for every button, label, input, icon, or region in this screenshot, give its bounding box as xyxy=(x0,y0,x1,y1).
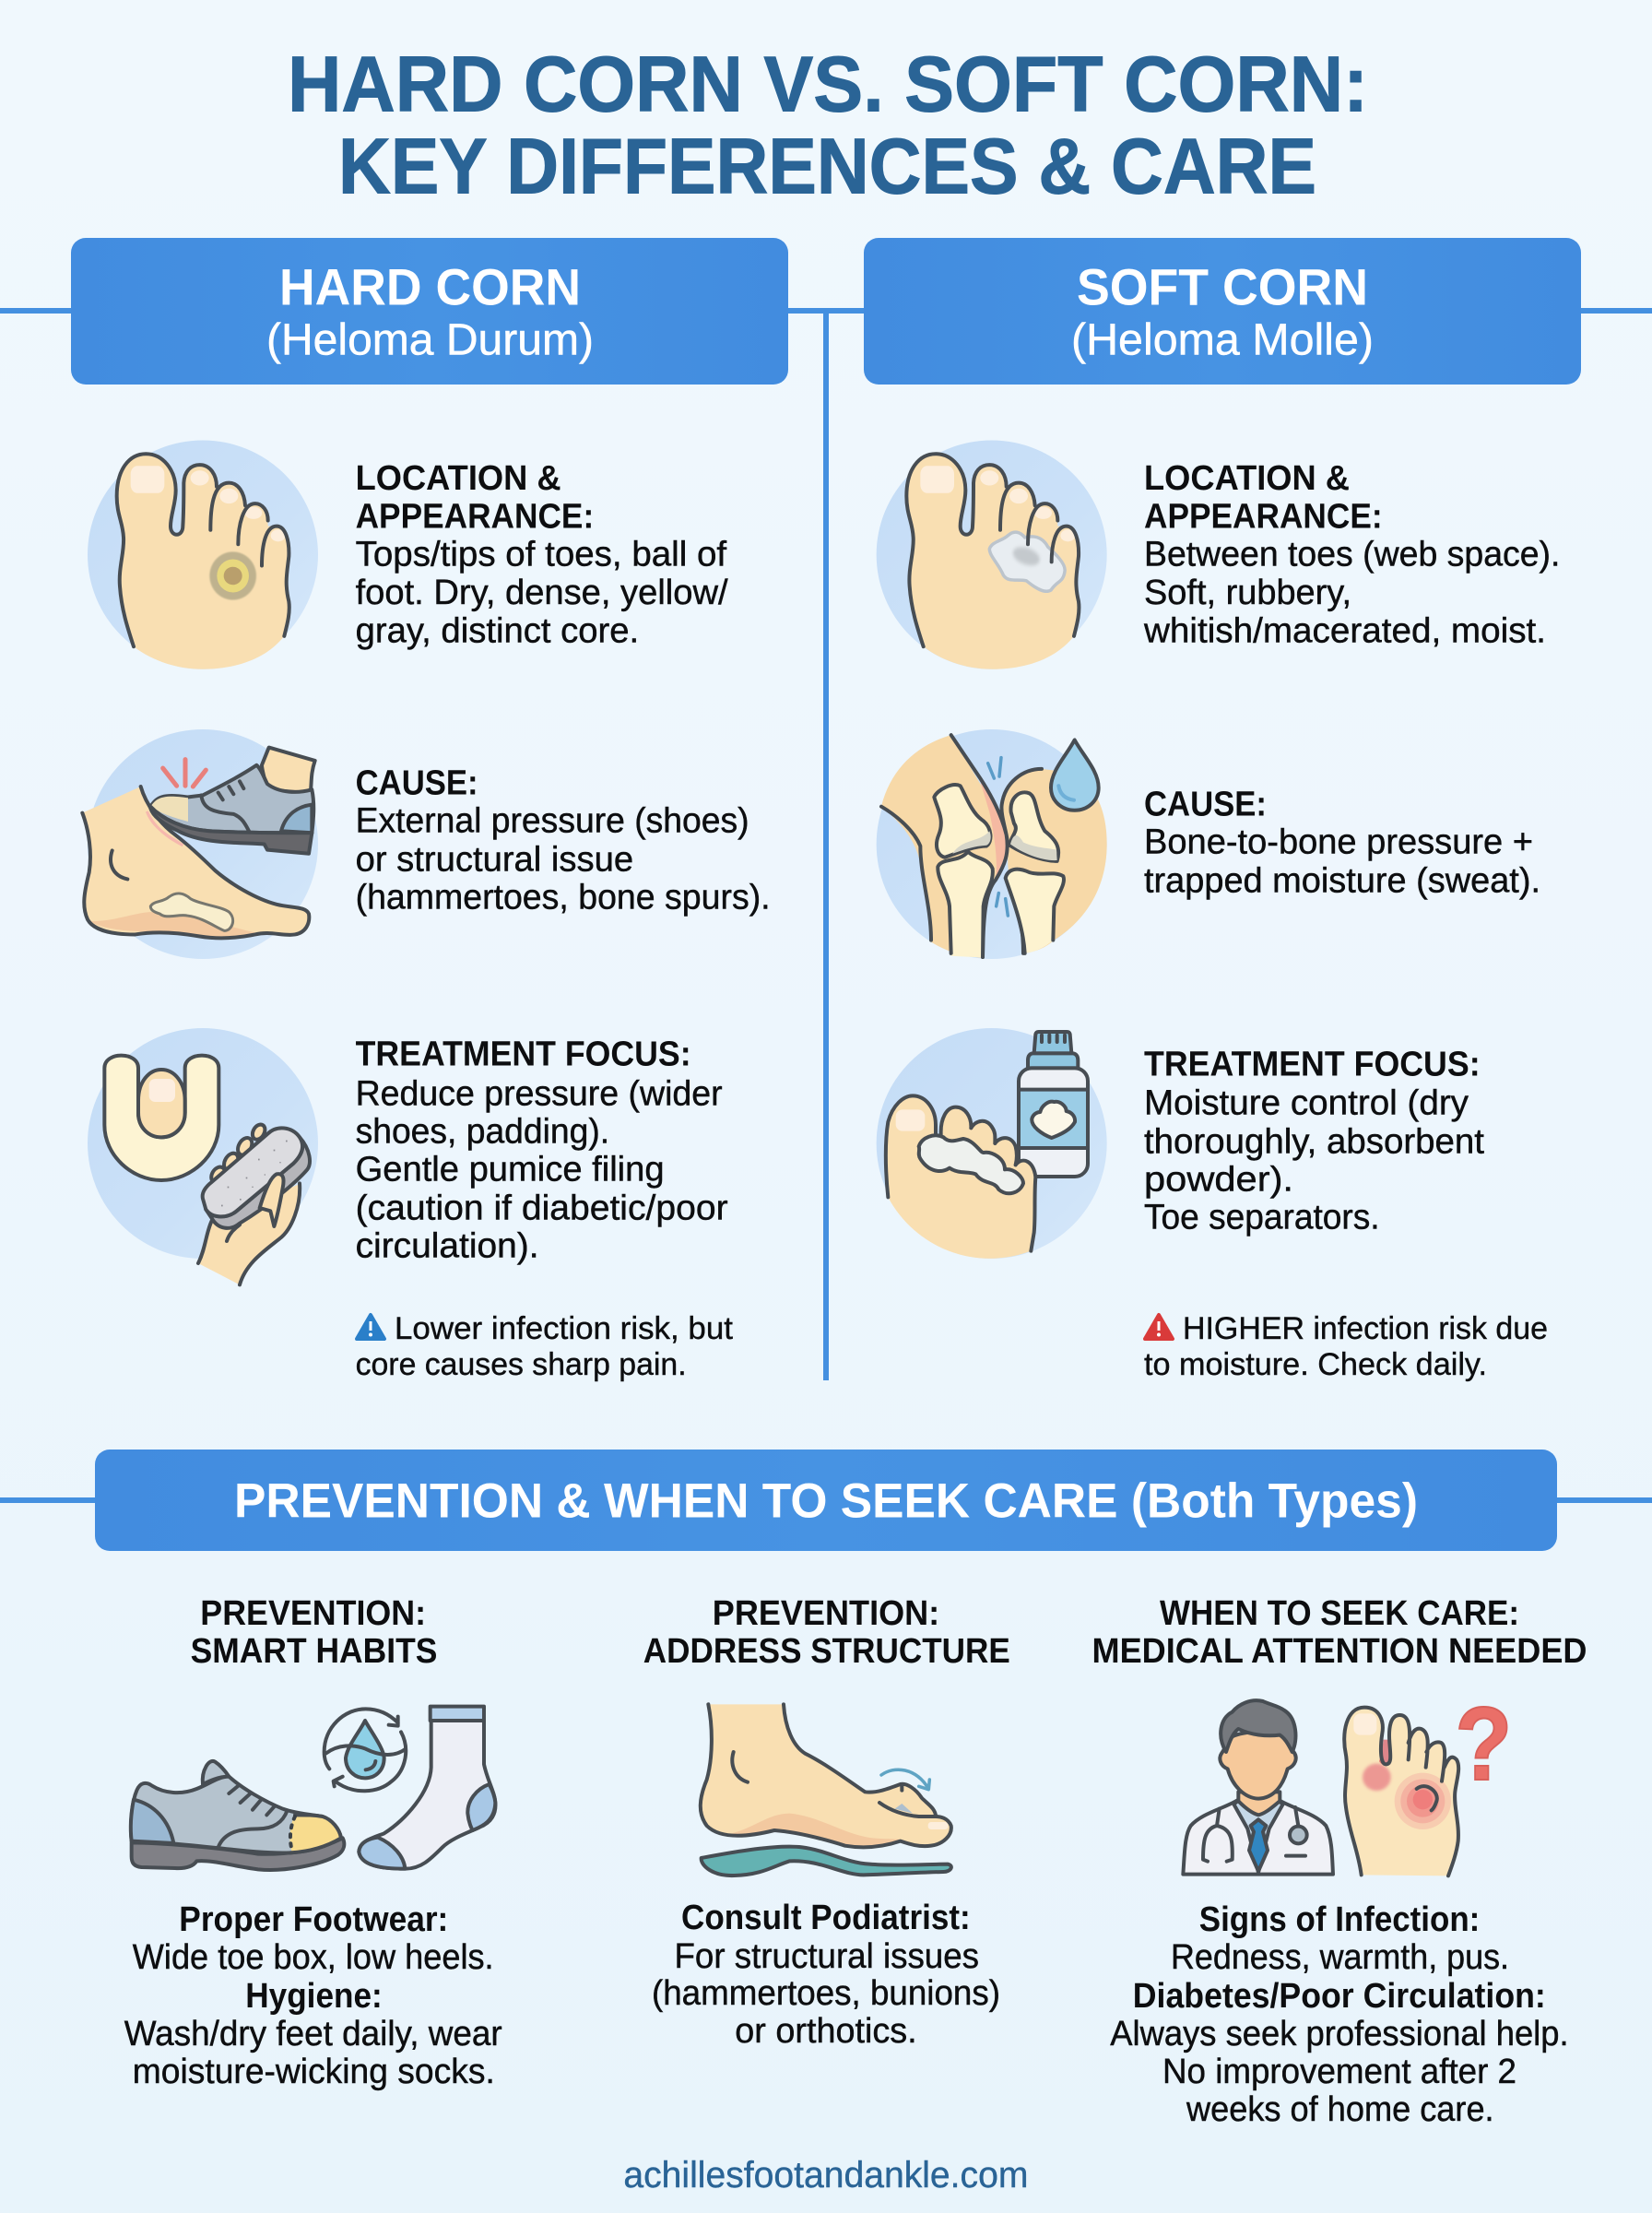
text: hard corn cause: External pressure (shoes) xyxy=(356,802,749,841)
text: footwear and hygiene: Proper Footwear: xyxy=(179,1900,448,1939)
icon: toe bones and moisture drop xyxy=(877,729,1107,959)
text: footwear and hygiene: Hygiene: xyxy=(245,1977,383,2016)
text: soft corn treatment focus: TREATMENT FOCUS: xyxy=(1144,1046,1481,1084)
heading: prevention smart habits xyxy=(191,1594,437,1671)
text: soft corn cause: CAUSE: xyxy=(1144,786,1267,824)
text: footwear and hygiene: Wide toe box, low heels. xyxy=(133,1938,494,1977)
callout: hard corn infection risk xyxy=(356,1311,734,1382)
text: consult podiatrist: (hammertoes, bunions) xyxy=(652,1974,1000,2013)
title xyxy=(288,41,1368,210)
text: soft corn treatment focus: thoroughly, absorbent xyxy=(1144,1123,1484,1162)
text: soft corn treatment focus: Toe separators. xyxy=(1144,1199,1380,1237)
icon: toe pad and pumice stone xyxy=(88,1028,318,1284)
icon: toe separator and powder bottle xyxy=(877,1028,1107,1259)
text: signs of infection and diabetes advice: No improvement after 2 xyxy=(1162,2053,1516,2091)
icon: foot with hammertoe over insole xyxy=(701,1704,951,1876)
text: signs of infection and diabetes advice: Always seek professional help. xyxy=(1110,2015,1569,2053)
heading: prevention address structure: PREVENTION: xyxy=(713,1594,939,1633)
text: hard corn treatment focus: TREATMENT FOCUS: xyxy=(356,1035,691,1073)
text: hard corn treatment focus: shoes, padding). xyxy=(356,1112,609,1151)
icon: foot with soft corn xyxy=(877,441,1107,669)
icon: foot with hard corn xyxy=(88,441,318,669)
text: consult podiatrist: or orthotics. xyxy=(735,2012,917,2051)
text: hard corn treatment focus xyxy=(356,1035,728,1265)
icon: shoe pressing on foot xyxy=(82,729,318,959)
text: signs of infection and diabetes advice: Redness, warmth, pus. xyxy=(1171,1938,1509,1977)
text: soft corn treatment focus: powder). xyxy=(1144,1160,1293,1199)
text: soft corn location and appearance: whitish/macerated, moist. xyxy=(1143,612,1546,651)
text: soft corn location and appearance: LOCATION & xyxy=(1144,459,1350,498)
text: hard corn location and appearance: LOCATION & xyxy=(356,459,561,498)
text: hard corn treatment focus: Gentle pumice filing xyxy=(356,1151,665,1189)
footer: website: achillesfootandankle.com xyxy=(623,2155,1028,2195)
text: hard corn location and appearance: Tops/tips of toes, ball of xyxy=(356,535,727,574)
text: hard corn treatment focus: (caution if diabetic/poor xyxy=(356,1189,728,1228)
text: soft corn cause: Bone-to-bone pressure + xyxy=(1144,822,1533,861)
heading: when to seek care: MEDICAL ATTENTION NEEDED xyxy=(1092,1632,1587,1671)
text: signs of infection and diabetes advice: Diabetes/Poor Circulation: xyxy=(1133,1977,1546,2016)
text: hard corn location and appearance: gray, distinct core. xyxy=(356,612,639,651)
text: footwear and hygiene: Wash/dry feet daily, wear xyxy=(124,2015,502,2053)
callout: hard corn infection risk: Lower infection risk, but xyxy=(395,1311,734,1346)
text: soft corn location and appearance xyxy=(1143,459,1560,651)
heading: prevention address structure: ADDRESS STRUCTURE xyxy=(643,1632,1010,1671)
text: hard corn cause: (hammertoes, bone spurs). xyxy=(356,878,771,917)
text: hard corn cause xyxy=(356,763,771,917)
text: signs of infection and diabetes advice xyxy=(1110,1900,1569,2129)
icon: doctor and infected foot xyxy=(1183,1686,1512,1876)
title: HARD CORN VS. SOFT CORN: xyxy=(288,41,1368,129)
text: hard corn cause: or structural issue xyxy=(356,841,633,880)
callout: soft corn infection risk: HIGHER infection risk due xyxy=(1183,1311,1548,1346)
panel header: hard corn xyxy=(71,238,788,385)
title: KEY DIFFERENCES & CARE xyxy=(338,124,1316,210)
panel header: soft corn: SOFT CORN xyxy=(1077,258,1368,315)
text: soft corn location and appearance: Between toes (web space). xyxy=(1144,535,1560,574)
icon: doctor and infected foot: ? xyxy=(1455,1686,1512,1803)
icon: shoe, moisture cycle and sock xyxy=(131,1707,495,1870)
text: footwear and hygiene xyxy=(124,1900,502,2091)
text: soft corn cause: trapped moisture (sweat). xyxy=(1144,861,1540,900)
banner: prevention and when to seek care: PREVENTION & WHEN TO SEEK CARE (Both Types) xyxy=(234,1473,1418,1529)
text: hard corn location and appearance xyxy=(356,459,728,651)
panel header: soft corn: (Heloma Molle) xyxy=(1071,315,1374,365)
text: soft corn location and appearance: APPEARANCE: xyxy=(1144,498,1383,537)
callout: hard corn infection risk: core causes sharp pain. xyxy=(356,1347,687,1382)
banner: prevention and when to seek care xyxy=(95,1450,1557,1551)
heading: prevention address structure xyxy=(643,1594,1010,1671)
heading: when to seek care xyxy=(1092,1594,1587,1671)
text: hard corn treatment focus: circulation). xyxy=(356,1226,539,1265)
heading: prevention smart habits: PREVENTION: xyxy=(200,1594,426,1633)
text: signs of infection and diabetes advice: weeks of home care. xyxy=(1186,2090,1494,2129)
text: soft corn cause xyxy=(1144,786,1540,900)
text: consult podiatrist: Consult Podiatrist: xyxy=(681,1899,971,1937)
heading: when to seek care: WHEN TO SEEK CARE: xyxy=(1160,1594,1519,1633)
text: hard corn location and appearance: APPEARANCE: xyxy=(356,498,594,537)
text: soft corn location and appearance: Soft, rubbery, xyxy=(1144,574,1351,612)
text: soft corn treatment focus xyxy=(1144,1046,1484,1237)
panel header: soft corn xyxy=(864,238,1581,385)
text: consult podiatrist: For structural issues xyxy=(675,1937,979,1976)
text: signs of infection and diabetes advice: Signs of Infection: xyxy=(1199,1900,1480,1939)
callout: soft corn infection risk: to moisture. Check daily. xyxy=(1144,1347,1487,1382)
text: hard corn location and appearance: foot. Dry, dense, yellow/ xyxy=(356,574,728,612)
text: consult podiatrist xyxy=(652,1899,1000,2051)
panel header: hard corn: (Heloma Durum) xyxy=(266,315,594,365)
panel header: hard corn: HARD CORN xyxy=(279,258,581,315)
callout: soft corn infection risk xyxy=(1144,1311,1548,1382)
text: hard corn treatment focus: Reduce pressure (wider xyxy=(356,1075,723,1114)
text: footwear and hygiene: moisture-wicking socks. xyxy=(133,2053,495,2091)
text: hard corn cause: CAUSE: xyxy=(356,763,478,802)
heading: prevention smart habits: SMART HABITS xyxy=(191,1632,437,1671)
text: soft corn treatment focus: Moisture control (dry xyxy=(1144,1084,1469,1123)
